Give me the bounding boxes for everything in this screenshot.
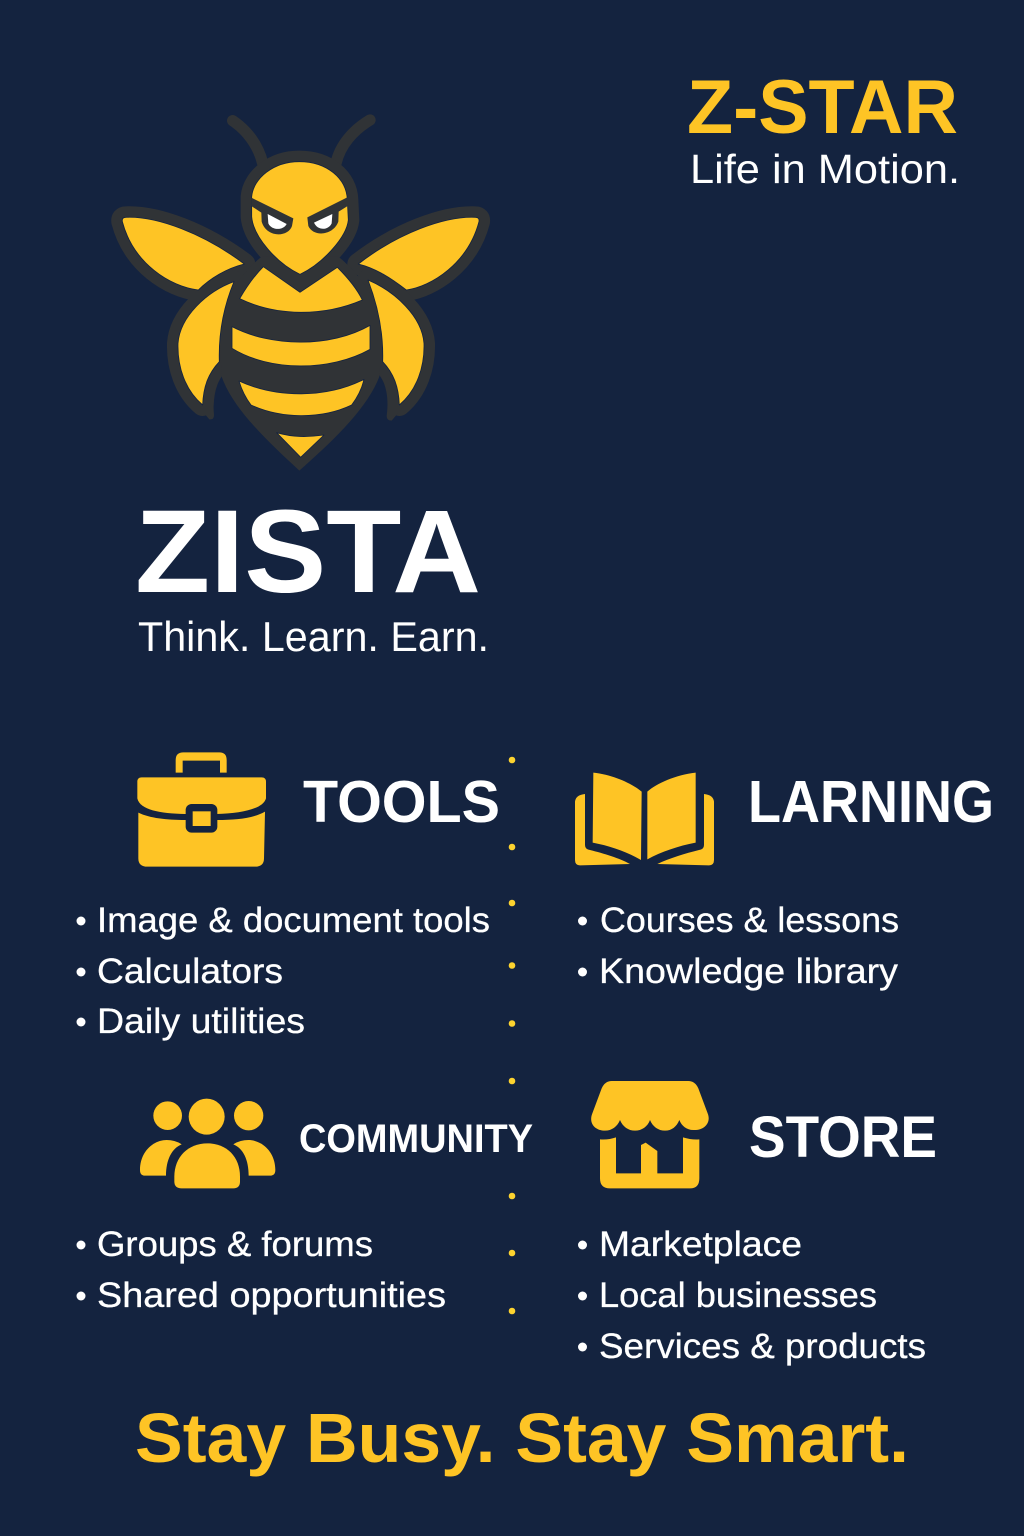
slogan: Stay Busy. Stay Smart. [135, 1399, 909, 1477]
heading: store: STORE [749, 1105, 937, 1170]
panel: community [76, 1099, 533, 1315]
upper left wing [122, 217, 244, 290]
left wing lower tip [190, 357, 223, 419]
icon: briefcase [137, 752, 266, 867]
head [252, 162, 348, 274]
brand: Z-STAR: Z-STAR [687, 65, 958, 150]
icon: people group [140, 1099, 275, 1188]
list: tools: Daily utilities [97, 1002, 305, 1041]
lower left wing [178, 282, 234, 405]
brand: ZISTA: ZISTA [135, 486, 481, 618]
heading: larning: LARNING [748, 769, 994, 835]
left eye [268, 214, 287, 229]
list: learning: Knowledge library [599, 952, 899, 991]
list: store: Services & products [599, 1327, 926, 1366]
lower right wing [368, 280, 424, 405]
panel: learning [575, 769, 994, 991]
stinger tip [277, 433, 324, 457]
tagline: Life in Motion: Life in Motion. [690, 146, 960, 192]
icon: storefront [591, 1081, 709, 1188]
list: community: Shared opportunities [97, 1276, 446, 1315]
icon: bee logo [122, 120, 479, 471]
right brow and eye socket [307, 197, 349, 233]
left brow and eye socket [251, 198, 293, 234]
lower stripe [239, 379, 364, 416]
heading: tools: TOOLS [303, 769, 500, 835]
list: store: Marketplace [599, 1225, 802, 1264]
upper right wing [358, 217, 479, 290]
right wing lower tip [379, 357, 412, 421]
list: community: Groups & forums [97, 1225, 373, 1264]
dotted divider [509, 757, 515, 1314]
middle stripe [232, 325, 370, 366]
tagline: Think Learn Earn: Think. Learn. Earn. [138, 613, 489, 660]
list: learning: Courses & lessons [600, 901, 899, 940]
list: community [76, 1225, 446, 1315]
list: tools: Calculators [97, 952, 283, 991]
right eye [314, 214, 332, 229]
list: store: Local businesses [599, 1276, 877, 1315]
panel: store [578, 1081, 937, 1366]
list: tools: Image & document tools [97, 901, 490, 940]
icon: open book [575, 773, 714, 865]
list: store [578, 1225, 926, 1366]
list: learning [578, 901, 899, 991]
heading: community: COMMUNITY [299, 1117, 533, 1161]
panel: tools [76, 752, 500, 1041]
list: tools [76, 901, 490, 1041]
thorax stripe [240, 267, 362, 312]
brand: Z-STAR [687, 65, 960, 192]
